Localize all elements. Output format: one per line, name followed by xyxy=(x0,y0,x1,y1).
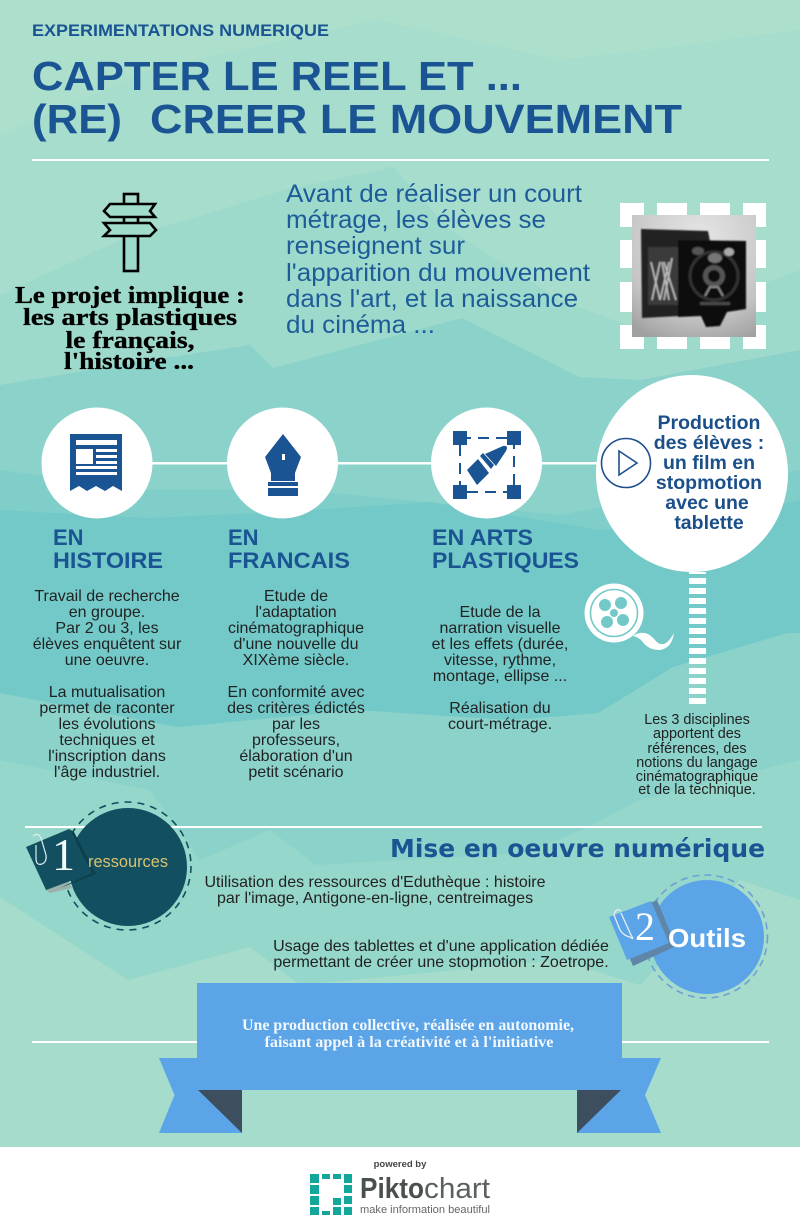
intro text xyxy=(286,180,590,339)
text block: project disciplines xyxy=(15,283,245,375)
panel: francais: par les xyxy=(272,716,320,733)
panel: histoire: les évolutions xyxy=(59,716,155,733)
panel: production circle: tablette xyxy=(674,512,744,534)
banner ribbon: Une production collective, réalisée en autonomie, xyxy=(242,1017,574,1034)
text block: les 3 disciplines: apportent des xyxy=(653,726,741,742)
panel: francais: En conformité avec xyxy=(228,684,364,701)
panel: histoire: techniques et xyxy=(59,732,155,749)
panel: francais: XIXème siècle. xyxy=(243,652,349,669)
panel: arts plastiques: PLASTIQUES xyxy=(432,548,579,573)
text block: project disciplines: Le projet implique : xyxy=(15,283,245,309)
icon: play button xyxy=(602,438,650,488)
footer xyxy=(0,1147,800,1227)
panel: arts plastiques: Etude de la xyxy=(460,604,541,621)
text block: tablettes xyxy=(273,938,609,971)
title: CAPTER LE REEL ET ... xyxy=(32,53,522,99)
dashed connector xyxy=(689,572,706,704)
panel: arts plastiques: EN ARTS xyxy=(432,525,533,550)
title: (RE) xyxy=(32,96,122,142)
badge: ressources xyxy=(26,802,191,930)
panel: histoire: La mutualisation xyxy=(49,684,165,701)
text block: les 3 disciplines: et de la technique. xyxy=(638,782,756,798)
footer: chart xyxy=(424,1173,490,1205)
text block: project disciplines: le français, xyxy=(66,328,194,354)
text block: les 3 disciplines: références, des xyxy=(647,741,747,757)
panel: histoire: permet de raconter xyxy=(39,700,175,717)
title: CREER LE MOUVEMENT xyxy=(150,96,682,142)
text block: tablettes: permettant de créer une stopmotion : Zoetrope. xyxy=(273,954,609,971)
panel: francais: d'une nouvelle du xyxy=(234,636,358,653)
panel: francais: professeurs, xyxy=(252,732,340,749)
panel: production circle: avec une xyxy=(665,492,749,514)
panel: production circle: Production xyxy=(658,412,760,434)
panel: francais: élaboration d'un xyxy=(239,748,353,765)
badge: ressources: ressources xyxy=(88,853,168,871)
text block: les 3 disciplines xyxy=(636,712,758,798)
badge: outils: Outils xyxy=(668,923,746,953)
panel: histoire: en groupe. xyxy=(69,604,145,621)
badge: outils: 2 xyxy=(635,904,655,949)
panel: francais: cinématographique xyxy=(228,620,364,637)
banner ribbon: faisant appel à la créativité et à l'initiative xyxy=(264,1034,554,1051)
intro text: renseignent sur xyxy=(286,232,465,260)
intro text: Avant de réaliser un court xyxy=(286,180,582,208)
panel: production circle: stopmotion xyxy=(656,472,762,494)
title xyxy=(32,53,682,142)
text block: project disciplines: l'histoire ... xyxy=(64,349,194,375)
panel: arts plastiques: montage, ellipse ... xyxy=(433,668,567,685)
text block: project disciplines: les arts plastiques xyxy=(23,305,237,331)
panel: production circle: un film en xyxy=(663,452,755,474)
text block: les 3 disciplines: cinématographique xyxy=(636,769,758,785)
panel: francais: Etude de xyxy=(264,588,328,605)
text block: les 3 disciplines: Les 3 disciplines xyxy=(644,712,750,728)
footer: powered by xyxy=(374,1159,427,1170)
panel: francais: EN xyxy=(228,525,259,550)
text block: eduthèque xyxy=(204,874,546,907)
panel: arts plastiques: et les effets (durée, xyxy=(432,636,568,653)
panel: francais: l'adaptation xyxy=(255,604,337,621)
icon: paintbrush in frame xyxy=(453,431,521,499)
panel: arts plastiques: court-métrage. xyxy=(448,716,552,733)
badge: ressources: 1 xyxy=(52,829,75,880)
badge: outils xyxy=(609,875,768,998)
icon: pen nib xyxy=(265,434,301,496)
panel: francais: FRANCAIS xyxy=(228,548,350,573)
panel: francais: des critères édictés xyxy=(227,700,365,717)
panel: arts plastiques: narration visuelle xyxy=(440,620,561,637)
intro text: l'apparition du mouvement xyxy=(286,259,590,287)
icon: newspaper xyxy=(70,434,122,491)
panel: histoire xyxy=(33,408,182,781)
panel: arts plastiques: vitesse, rythme, xyxy=(444,652,556,669)
panel: histoire: HISTOIRE xyxy=(53,548,163,573)
panel: histoire: Par 2 ou 3, les xyxy=(55,620,159,637)
icon: signpost xyxy=(104,194,156,271)
connector line xyxy=(97,462,617,464)
icon: film reel xyxy=(584,584,674,650)
text block: eduthèque: par l'image, Antigone-en-ligne, centreimages xyxy=(217,890,533,907)
intro text: du cinéma ... xyxy=(286,311,435,339)
panel: production circle xyxy=(596,375,788,572)
footer: make information beautiful xyxy=(360,1204,490,1216)
banner ribbon xyxy=(159,983,661,1133)
eyebrow heading: EXPERIMENTATIONS NUMERIQUE xyxy=(32,22,329,40)
panel: francais: petit scénario xyxy=(248,764,344,781)
text block: eduthèque: Utilisation des ressources d'Eduthèque : histoire xyxy=(204,874,546,891)
panel: histoire: l'inscription dans xyxy=(48,748,166,765)
panel: histoire: une oeuvre. xyxy=(65,652,149,669)
footer: Pikto xyxy=(360,1173,424,1205)
panel: histoire: élèves enquêtent sur xyxy=(33,636,182,653)
panel: histoire: l'âge industriel. xyxy=(54,764,160,781)
panel: histoire: Travail de recherche xyxy=(34,588,180,605)
panel: arts plastiques xyxy=(431,408,579,733)
intro text: dans l'art, et la naissance xyxy=(286,285,578,313)
text block: les 3 disciplines: notions du langage xyxy=(636,755,758,771)
heading: mise en oeuvre: Mise en oeuvre numérique xyxy=(390,834,765,863)
panel: histoire: EN xyxy=(53,525,84,550)
logo: piktochart mark xyxy=(310,1174,352,1215)
panel: arts plastiques: Réalisation du xyxy=(449,700,551,717)
panel: production circle: des élèves : xyxy=(654,432,764,454)
intro text: métrage, les élèves se xyxy=(286,206,546,234)
panel: francais xyxy=(227,408,365,781)
photo: vintage camera xyxy=(620,203,766,349)
text block: tablettes: Usage des tablettes et d'une application dédiée xyxy=(273,938,609,955)
